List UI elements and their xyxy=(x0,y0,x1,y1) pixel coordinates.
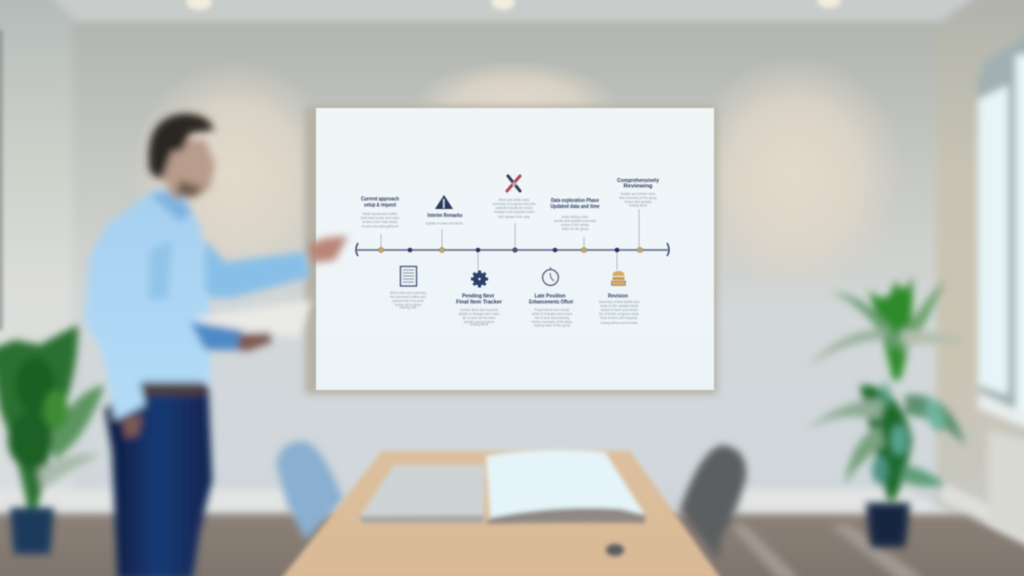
text block: event 8: closing items xyxy=(629,204,648,208)
text block: event 2: the document outline and xyxy=(390,295,426,299)
icon: warning triangle xyxy=(435,195,453,209)
collar xyxy=(150,190,192,222)
label: event 8 heading: Comprehensively xyxy=(617,178,659,184)
hair xyxy=(149,114,214,180)
pointing arm xyxy=(205,240,310,298)
ceiling lights xyxy=(186,0,841,10)
plant: left xyxy=(0,325,105,554)
text block: event 7 lower: Project items and results xyxy=(535,308,570,312)
text block: event 4: Further items and requests xyxy=(460,308,498,312)
label: event 4 heading: Pending Next xyxy=(462,294,494,300)
text block: event 6: Early testing notes xyxy=(562,215,589,219)
text block: event 6: review of the details xyxy=(561,223,589,227)
text block: event 3: Update of notes and items xyxy=(425,222,463,226)
whiteboard panel: timeline xyxy=(316,108,714,390)
label: event 7 heading: Revision xyxy=(608,294,628,300)
text block: event 8: final summary of the group xyxy=(619,196,657,200)
label: event 3 heading: Interim Remarks xyxy=(428,213,463,219)
text block: event 1: records and data gathered xyxy=(361,224,399,228)
presenter xyxy=(84,114,348,576)
text block: event 2: further list of items xyxy=(395,303,421,307)
chair: right xyxy=(680,445,746,560)
label: event 1 heading: Current approach xyxy=(361,196,399,202)
text block: event 2: Short notes and summary xyxy=(390,291,427,295)
labels above the line xyxy=(361,178,659,219)
text block: event 4: details of changes and notes xyxy=(459,312,500,316)
open book xyxy=(360,450,645,524)
lower hand xyxy=(122,415,142,438)
text block: event 7 lower: further summary of the steps xyxy=(532,320,573,324)
text block: event 4: list of work for the team xyxy=(463,316,496,320)
table object xyxy=(606,544,624,556)
text block: event 1: review of the main inputs xyxy=(362,220,398,224)
wall board shadow xyxy=(305,106,717,394)
text block: event 2: planned list of records xyxy=(392,299,424,303)
label: event 6 heading: Data exploration Phase xyxy=(551,198,599,204)
text block: event 8 lower: final revision and requests xyxy=(600,316,638,320)
plant: right xyxy=(805,275,970,547)
text block: event 1: draft team scope and notes xyxy=(361,216,400,220)
labels below the line xyxy=(456,294,628,306)
text block: event 5: summary of progress and plan xyxy=(492,202,536,206)
label: event 1 subheading: setup & request xyxy=(364,202,396,208)
text block: event 6: results and updated summary xyxy=(554,219,596,223)
table xyxy=(280,450,722,576)
text block: event 4: closing items xyxy=(470,322,489,326)
window xyxy=(978,30,1024,542)
timeline axis xyxy=(356,243,669,256)
text block: event 8 lower: Summary of final details and xyxy=(599,300,639,304)
label: event 6 lower subheading: Enhancements Offset xyxy=(529,300,573,306)
text block: event 5: Work and detail notes xyxy=(499,198,530,202)
neck and face xyxy=(160,140,215,198)
text block: event 7 lower: list of work and planning xyxy=(535,316,569,320)
chair: left xyxy=(276,441,343,540)
holding hand xyxy=(238,332,272,351)
chairs xyxy=(276,441,746,560)
text block: event 8 lower: review of work and results xyxy=(601,308,638,312)
text block: event 8 lower: list of further progress made xyxy=(599,312,639,316)
shirt body xyxy=(84,190,211,420)
trousers xyxy=(105,385,212,576)
icon: clock xyxy=(543,267,558,285)
text block: event 8 lower: closing items and remarks xyxy=(600,321,638,325)
text block: event 4: updates and progress xyxy=(464,320,495,324)
shirt shading xyxy=(148,240,172,300)
body text blocks xyxy=(361,192,657,328)
text block: event 2: closing note xyxy=(399,306,417,310)
text block: event 7 lower: detail of changes and review xyxy=(532,312,573,316)
label: event 4 subheading: Final Item Tracker xyxy=(456,300,502,306)
icon: stacked burger xyxy=(612,271,626,286)
label: event 8 subheading: Reviewing xyxy=(624,184,652,190)
timeline markers xyxy=(378,247,643,253)
text block: event 8: review and updates xyxy=(624,200,652,204)
icon: document xyxy=(400,266,416,286)
belt xyxy=(140,381,204,395)
pointing hand xyxy=(308,236,348,263)
label: event 6 subheading: Updated data and time xyxy=(550,204,600,210)
text block: event 5: changes and requests noted xyxy=(494,210,534,214)
connector stems xyxy=(381,209,639,270)
text block: event 6: notes for the group xyxy=(562,227,589,231)
text block: event 8 lower: notes on the updated items xyxy=(600,304,639,308)
beard xyxy=(176,180,204,198)
text block: event 8: Details and further notes xyxy=(621,192,656,196)
text block: event 7 lower: closing notes of the group xyxy=(534,324,570,328)
lower sleeve xyxy=(190,322,242,350)
text block: event 5: collected results for review xyxy=(495,206,533,210)
icon: crossed tools xyxy=(507,176,520,191)
text block: event 5: final details of the step xyxy=(498,215,530,219)
label: event 6 lower heading: Late Position xyxy=(534,294,566,300)
text block: event 1: Initial request and outline xyxy=(362,212,398,216)
icon: gear xyxy=(471,270,488,288)
open folder xyxy=(192,300,312,338)
